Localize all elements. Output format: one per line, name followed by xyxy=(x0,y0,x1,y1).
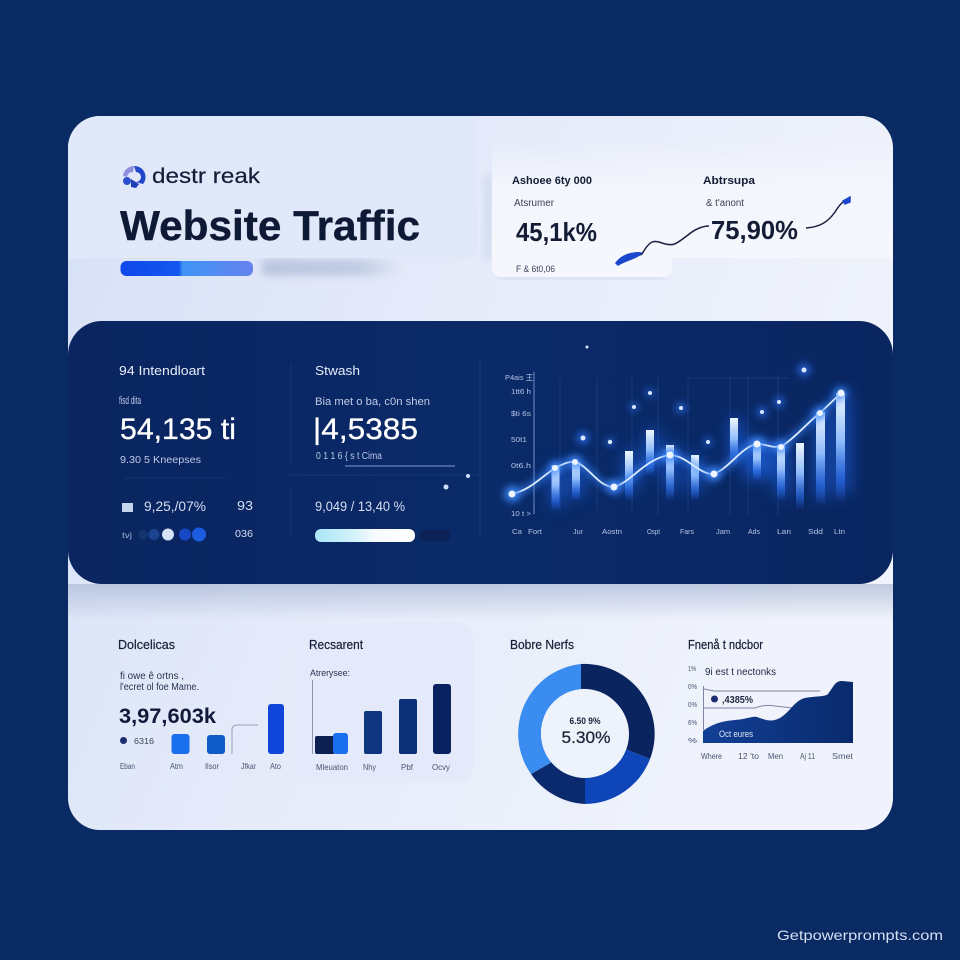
panel: dark traffic xyxy=(68,321,893,584)
brand name: destr reak xyxy=(152,164,260,188)
axis labels: Sdd xyxy=(808,527,823,536)
dividers xyxy=(125,360,480,536)
stat: lower middle: 9,049 / 13,40 % xyxy=(315,498,405,514)
bar chart: Atm xyxy=(170,762,183,771)
trend line xyxy=(512,393,841,494)
stat: lower left: 93 xyxy=(237,498,253,513)
panel: conversions xyxy=(118,638,284,771)
axis labels: Ca xyxy=(512,527,523,536)
axis labels: 50t1 xyxy=(511,435,527,444)
metric: left: F & 6t0,06 xyxy=(516,264,555,275)
value: 3,97,603k xyxy=(119,704,216,728)
bar chart xyxy=(312,680,451,772)
heading: Fnenå t ndcbor xyxy=(688,638,763,652)
metric: right xyxy=(703,175,798,245)
axis labels: Ltn xyxy=(834,527,845,536)
small metric: 6316 xyxy=(134,736,154,746)
bar chart: Mleuaton xyxy=(316,763,348,772)
line and bar chart xyxy=(504,346,849,536)
metric: left xyxy=(512,175,597,275)
heading: Recsarent xyxy=(309,638,363,652)
subheading: Atrerysee: xyxy=(310,668,350,679)
stat: left xyxy=(119,363,236,466)
metric: left: 45,1k% xyxy=(516,217,597,247)
y labels: 6% xyxy=(688,720,697,727)
bar chart: Ilsor xyxy=(205,762,219,771)
dashboard card xyxy=(68,116,893,830)
axis labels: $ti 6s xyxy=(511,409,531,418)
axis labels: Jam xyxy=(716,527,730,536)
stat: lower left: 036 xyxy=(235,529,253,540)
bar chart: Nhy xyxy=(363,763,376,772)
axis labels: Fort xyxy=(528,527,543,536)
area chart: Where xyxy=(701,751,722,761)
stat: left: 94 Intendloart xyxy=(119,363,205,378)
y labels: 1% xyxy=(688,666,696,673)
heading: Bobre Nerfs xyxy=(510,638,574,652)
area chart: Men xyxy=(768,751,783,761)
area chart: Aj 11 xyxy=(800,751,815,761)
stat: lower left: tvj xyxy=(122,530,132,540)
sparkline: left xyxy=(616,226,709,265)
axis labels: Lan xyxy=(777,527,791,536)
donut label: 5.30% xyxy=(562,728,610,747)
axis labels: Aostn xyxy=(602,527,622,536)
bars xyxy=(552,393,845,510)
area chart xyxy=(701,681,854,761)
callout xyxy=(711,695,753,706)
description xyxy=(120,671,199,693)
panel: recurrent xyxy=(290,623,473,783)
stat: left: fisd dita xyxy=(119,395,142,407)
donut chart xyxy=(518,664,655,804)
axis labels: Ads xyxy=(748,527,760,536)
axis labels: P4ais 王 xyxy=(505,373,533,382)
donut label xyxy=(562,716,610,747)
grid lines xyxy=(560,375,790,515)
bar chart xyxy=(120,704,284,771)
axis labels: 1tt6 h xyxy=(511,387,531,396)
area chart: Smet xyxy=(832,751,854,761)
panel: top metrics xyxy=(483,165,851,280)
axis labels: 0t6.h xyxy=(511,461,531,470)
stat: middle: Bia met o ba, c0n shen xyxy=(315,396,430,408)
heading: Dolcelicas xyxy=(118,638,175,652)
y labels: % xyxy=(688,738,697,745)
bar glow xyxy=(551,393,849,505)
donut label: 6.50 9% xyxy=(570,716,601,727)
axis labels xyxy=(505,373,845,536)
title: Website Traffic xyxy=(120,202,420,249)
bar chart: Eban xyxy=(120,762,135,771)
description: l'ecret ol foe Mame. xyxy=(120,682,199,693)
y labels: 0% xyxy=(688,684,697,691)
panel: header xyxy=(68,116,419,279)
metric: right: & t'anont xyxy=(706,198,744,209)
floating points xyxy=(577,346,810,446)
bar chart: Jfkar xyxy=(241,762,256,771)
stat: left: 54,135 ti xyxy=(120,413,236,446)
description: fi owe ê ortns , xyxy=(120,671,184,682)
icon: logo xyxy=(123,166,146,188)
trend points xyxy=(504,387,847,502)
stat: middle xyxy=(313,363,430,462)
axis labels: Jur xyxy=(573,527,583,536)
panel: donut xyxy=(510,638,655,804)
stat: lower left: 9,25,/07% xyxy=(144,498,206,514)
bar chart: Ato xyxy=(270,762,281,771)
subheading: 9i est t nectonks xyxy=(705,667,776,678)
bar chart: Pbf xyxy=(401,763,414,772)
callout: ,4385% xyxy=(722,695,753,706)
stat: middle: 0 1 1 6 { s t Cima xyxy=(316,451,382,462)
y labels: 0% xyxy=(688,702,697,709)
stat: middle: |4,5385 xyxy=(313,413,418,446)
panel: area chart xyxy=(688,638,854,761)
metric: right: 75,90% xyxy=(711,215,798,245)
axis labels: Ospt xyxy=(647,527,661,536)
sparkline: right xyxy=(806,197,850,228)
panel: dark traffic shadow xyxy=(68,584,893,620)
area chart: Oct eures xyxy=(719,729,753,739)
metric: left: Ashoee 6ty 000 xyxy=(512,175,592,187)
small metric xyxy=(120,736,154,746)
axis labels: Fars xyxy=(680,527,694,536)
stat: lower left xyxy=(122,498,253,542)
metric: left: Atsrumer xyxy=(514,198,555,209)
metric: right: Abtrsupa xyxy=(703,175,756,187)
trend line glow xyxy=(512,393,841,494)
stat: lower middle xyxy=(315,498,450,542)
bar chart: Ocvy xyxy=(432,763,450,772)
y labels xyxy=(688,666,697,745)
stat: middle: Stwash xyxy=(315,363,360,378)
progress bar xyxy=(120,261,253,276)
watermark: Getpowerprompts.com xyxy=(777,927,943,943)
axis labels: 10 t > xyxy=(511,509,532,518)
stat: left: 9.30 5 Kneepses xyxy=(120,454,201,466)
area chart: 12 'to xyxy=(738,751,759,761)
